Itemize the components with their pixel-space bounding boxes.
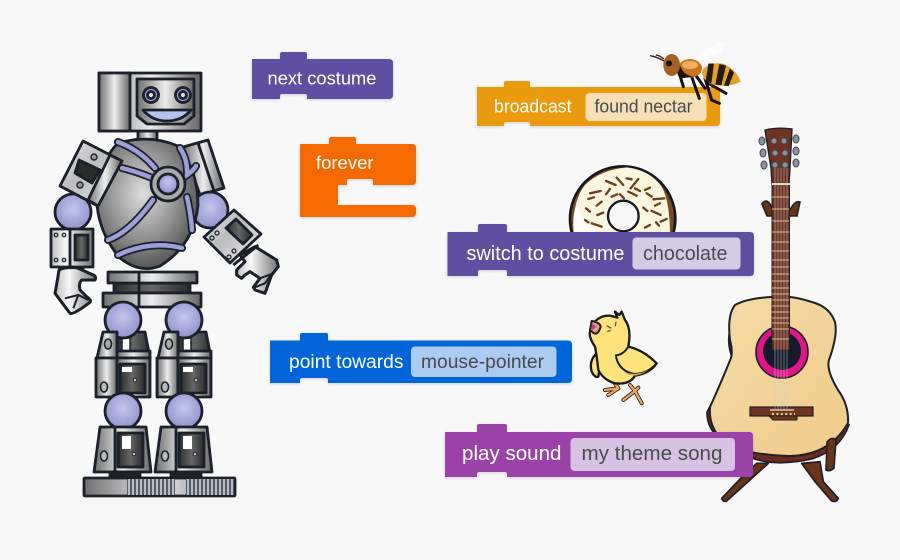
chick beak: [590, 321, 601, 334]
icon: donut: [570, 166, 675, 272]
block: point towards: point towards: [289, 352, 404, 373]
robot feet: [84, 478, 235, 496]
torso purple bands: [108, 142, 196, 255]
guitar back edge: [707, 330, 849, 463]
icon: guitar: [707, 128, 849, 501]
block: play sound: play sound: [462, 443, 562, 465]
block: broadcast: broadcast: [494, 96, 572, 116]
guitar sound hole: [756, 326, 808, 378]
robot left forearm: [51, 229, 93, 267]
torso core: [151, 167, 185, 201]
block: switch to costume: switch to costume: [466, 243, 624, 265]
block: play sound: [445, 424, 753, 477]
icon: bee: [650, 41, 741, 103]
input: chocolate: chocolate: [643, 243, 728, 265]
input: my theme song: [570, 438, 735, 471]
robot right upper arm: [183, 140, 224, 195]
robot torso: [97, 139, 198, 269]
block: next costume: next costume: [268, 68, 376, 88]
robot left leg: [94, 302, 151, 479]
icon: chick: [590, 312, 657, 403]
robot right leg: [155, 302, 212, 479]
robot right hand: [233, 245, 278, 293]
eyes: [144, 88, 190, 102]
input: my theme song: my theme song: [582, 443, 722, 465]
mouth: [143, 110, 191, 121]
guitar stand upright: [826, 438, 836, 471]
robot head: [99, 73, 201, 131]
input: chocolate: [632, 238, 740, 270]
guitar stand legs: [722, 462, 838, 501]
guitar bridge: [750, 407, 813, 420]
chick left wing: [591, 352, 599, 377]
block: forever: [300, 137, 416, 217]
input: mouse-pointer: [411, 346, 556, 377]
input: found nectar: [586, 93, 706, 121]
robot shoulder joints: [55, 192, 228, 230]
input: found nectar: found nectar: [594, 96, 692, 116]
input: mouse-pointer: mouse-pointer: [421, 352, 545, 373]
guitar neck: [772, 183, 790, 350]
block: next costume: [252, 52, 393, 99]
robot left upper arm: [60, 141, 122, 206]
guitar body: [710, 297, 848, 456]
robot right forearm: [204, 210, 261, 263]
robot left hand: [55, 267, 96, 314]
guitar stand hooks: [762, 201, 800, 216]
guitar strings: [775, 168, 787, 410]
block: switch to costume: [448, 224, 754, 276]
robot neck: [138, 131, 157, 141]
chick tail wing: [615, 347, 657, 374]
block: broadcast: [477, 81, 720, 126]
block: point towards: [270, 333, 572, 383]
block: forever: forever: [316, 152, 374, 173]
robot sprite: [51, 73, 278, 496]
donut sprinkles: [585, 178, 667, 228]
guitar headstock: [759, 128, 799, 184]
robot hips: [103, 272, 201, 307]
chick legs: [605, 384, 642, 403]
chick body: [590, 312, 657, 384]
